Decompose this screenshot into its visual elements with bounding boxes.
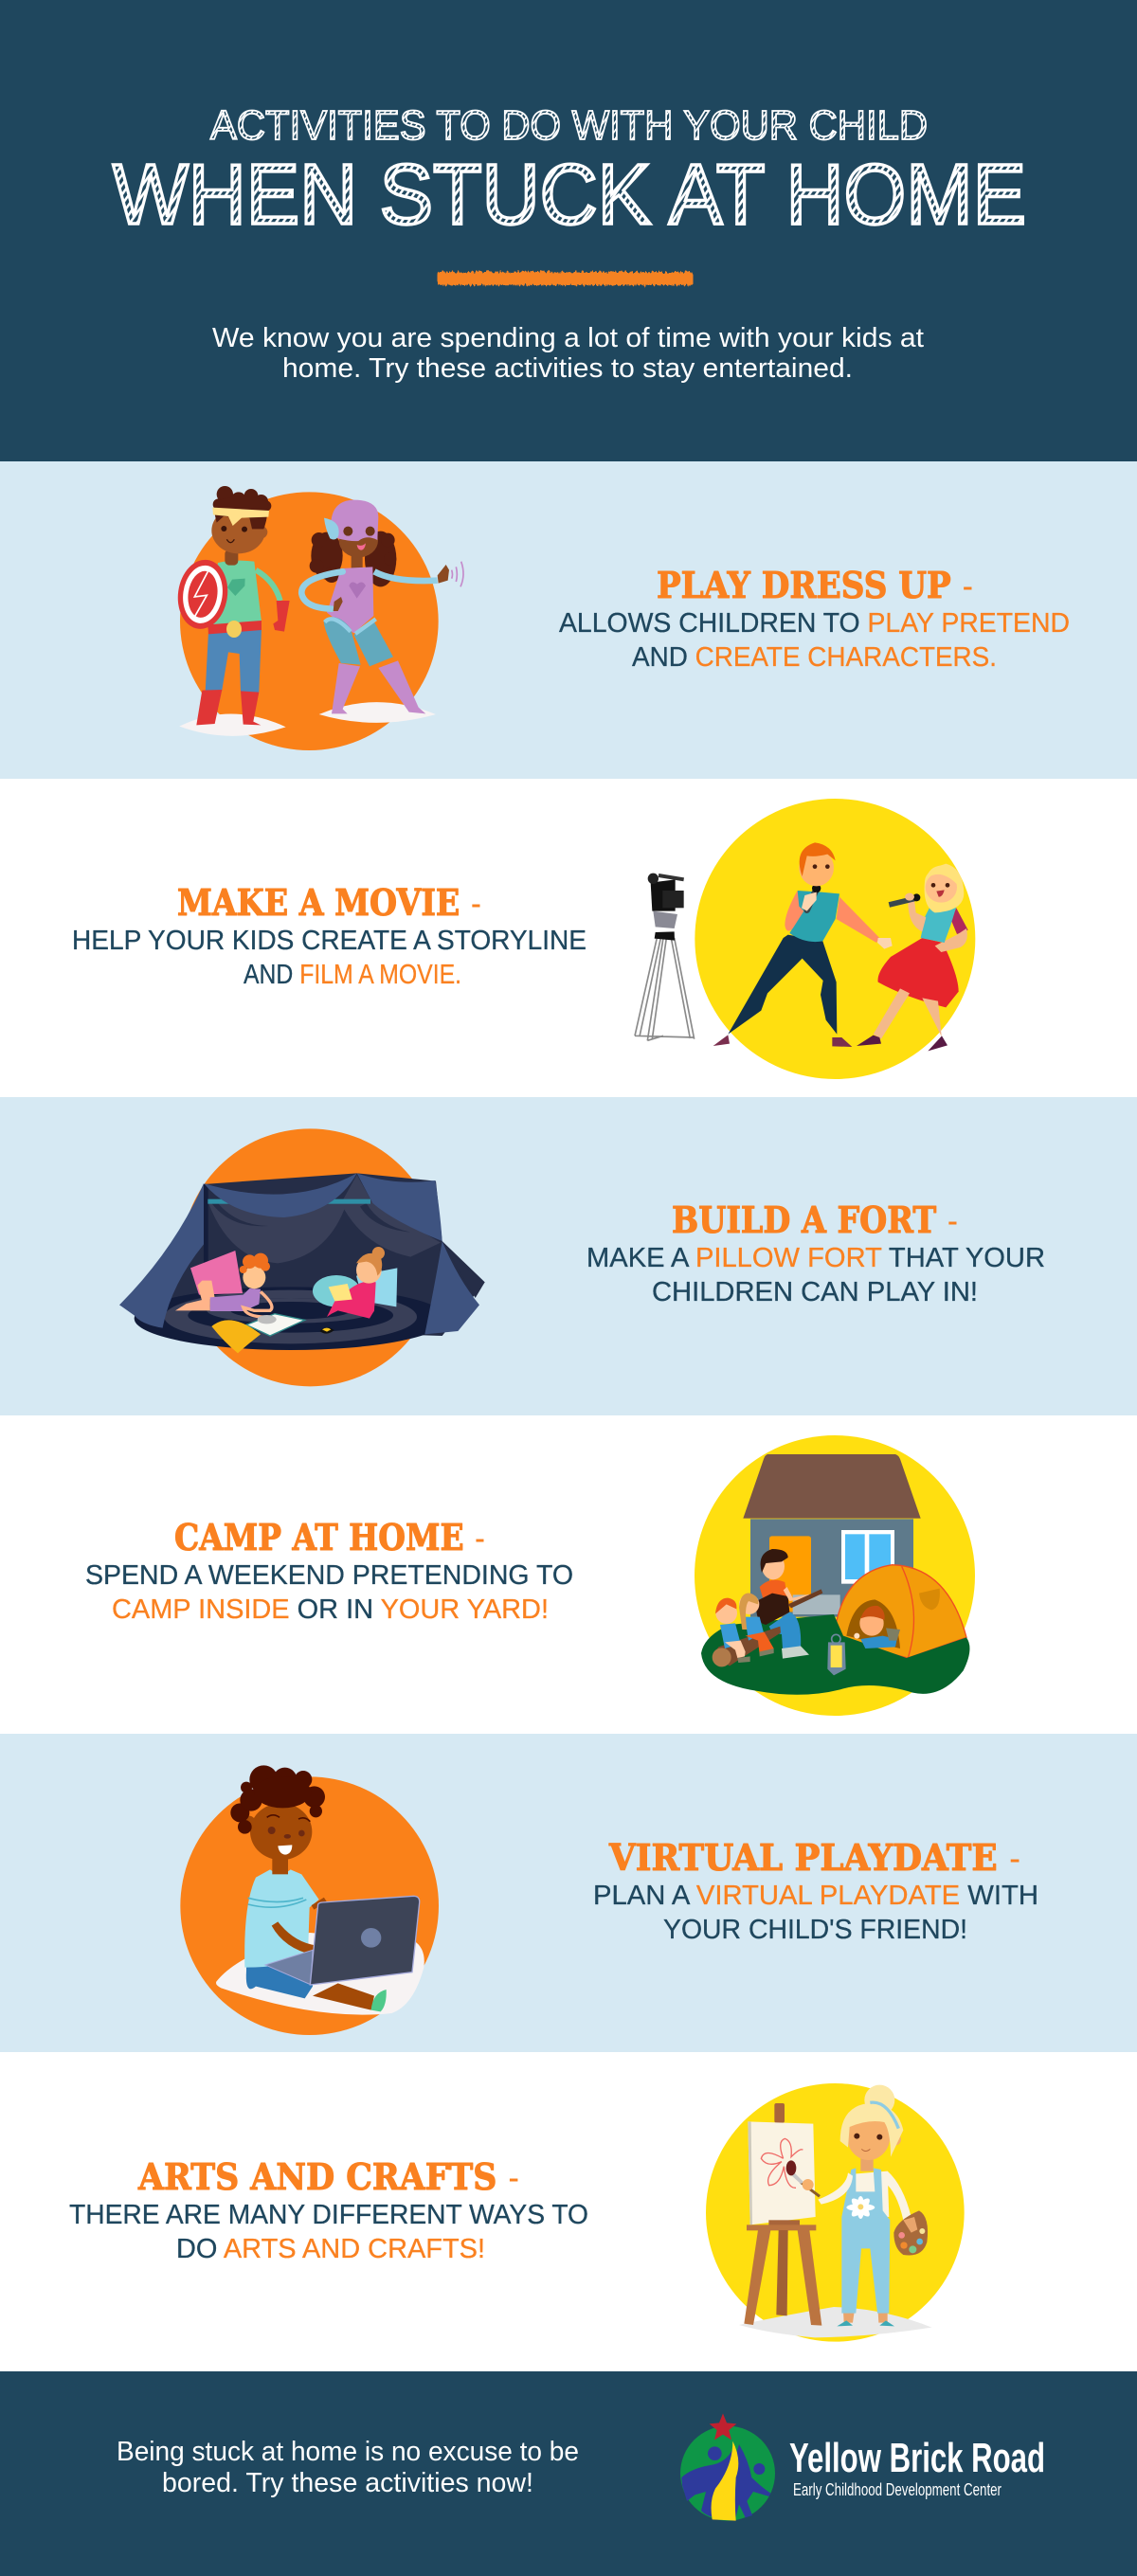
panel: camp at home <box>0 1415 1137 1734</box>
logo: Yellow Brick Road <box>680 2413 1045 2521</box>
description: AND CREATE CHARACTERS. <box>632 642 997 673</box>
description <box>587 1243 1045 1307</box>
panel: build a fort <box>0 1097 1137 1415</box>
title line one: ACTIVITIES TO DO WITH YOUR CHILD <box>210 102 928 149</box>
description <box>559 608 1070 673</box>
description <box>593 1881 1038 1945</box>
description: MAKE A PILLOW FORT THAT YOUR <box>587 1243 1045 1273</box>
description: AND FILM A MOVIE. <box>244 960 461 990</box>
description: ALLOWS CHILDREN TO PLAY PRETEND <box>559 608 1070 639</box>
title line two: WHEN STUCK AT HOME <box>113 148 1026 243</box>
orange chalk divider <box>438 272 694 285</box>
closing text: bored. Try these activities now! <box>162 2468 533 2498</box>
closing text <box>117 2437 579 2498</box>
description: CAMP INSIDE OR IN YOUR YARD! <box>112 1594 549 1625</box>
logo tagline: Early Childhood Development Center <box>793 2480 1002 2499</box>
description <box>85 1560 573 1625</box>
panel: play dress up <box>0 461 1137 779</box>
panel: header <box>0 0 1137 461</box>
description: PLAN A VIRTUAL PLAYDATE WITH <box>593 1881 1038 1911</box>
illustration: child painting <box>706 2083 965 2342</box>
description <box>72 926 587 990</box>
illustration: superhero kids <box>173 486 463 750</box>
heading: BUILD A FORT - <box>672 1198 958 1241</box>
description: CHILDREN CAN PLAY IN! <box>652 1277 978 1307</box>
panel: virtual playdate <box>0 1734 1137 2052</box>
intro text: We know you are spending a lot of time with your kids at <box>212 323 924 353</box>
description: THERE ARE MANY DIFFERENT WAYS TO <box>69 2200 588 2230</box>
closing text: Being stuck at home is no excuse to be <box>117 2437 579 2467</box>
description: HELP YOUR KIDS CREATE A STORYLINE <box>72 926 587 956</box>
description: YOUR CHILD'S FRIEND! <box>663 1915 967 1945</box>
heading: MAKE A MOVIE - <box>177 881 481 924</box>
description <box>69 2200 588 2264</box>
intro text <box>212 323 924 384</box>
heading: CAMP AT HOME - <box>174 1516 485 1558</box>
illustration: child with laptop <box>180 1765 439 2035</box>
description: DO ARTS AND CRAFTS! <box>176 2234 485 2264</box>
panel: make a movie <box>0 779 1137 1097</box>
heading: ARTS AND CRAFTS - <box>137 2155 519 2198</box>
description: SPEND A WEEKEND PRETENDING TO <box>85 1560 573 1591</box>
illustration: blanket fort <box>119 1128 485 1386</box>
illustration: camera and singing kids <box>635 799 975 1079</box>
heading: PLAY DRESS UP - <box>657 564 973 606</box>
illustration: camping at the house <box>695 1435 975 1716</box>
panel: footer <box>0 2371 1137 2576</box>
intro text: home. Try these activities to stay entertained. <box>282 353 853 384</box>
heading: VIRTUAL PLAYDATE - <box>608 1836 1020 1879</box>
panel: arts and crafts <box>0 2052 1137 2370</box>
